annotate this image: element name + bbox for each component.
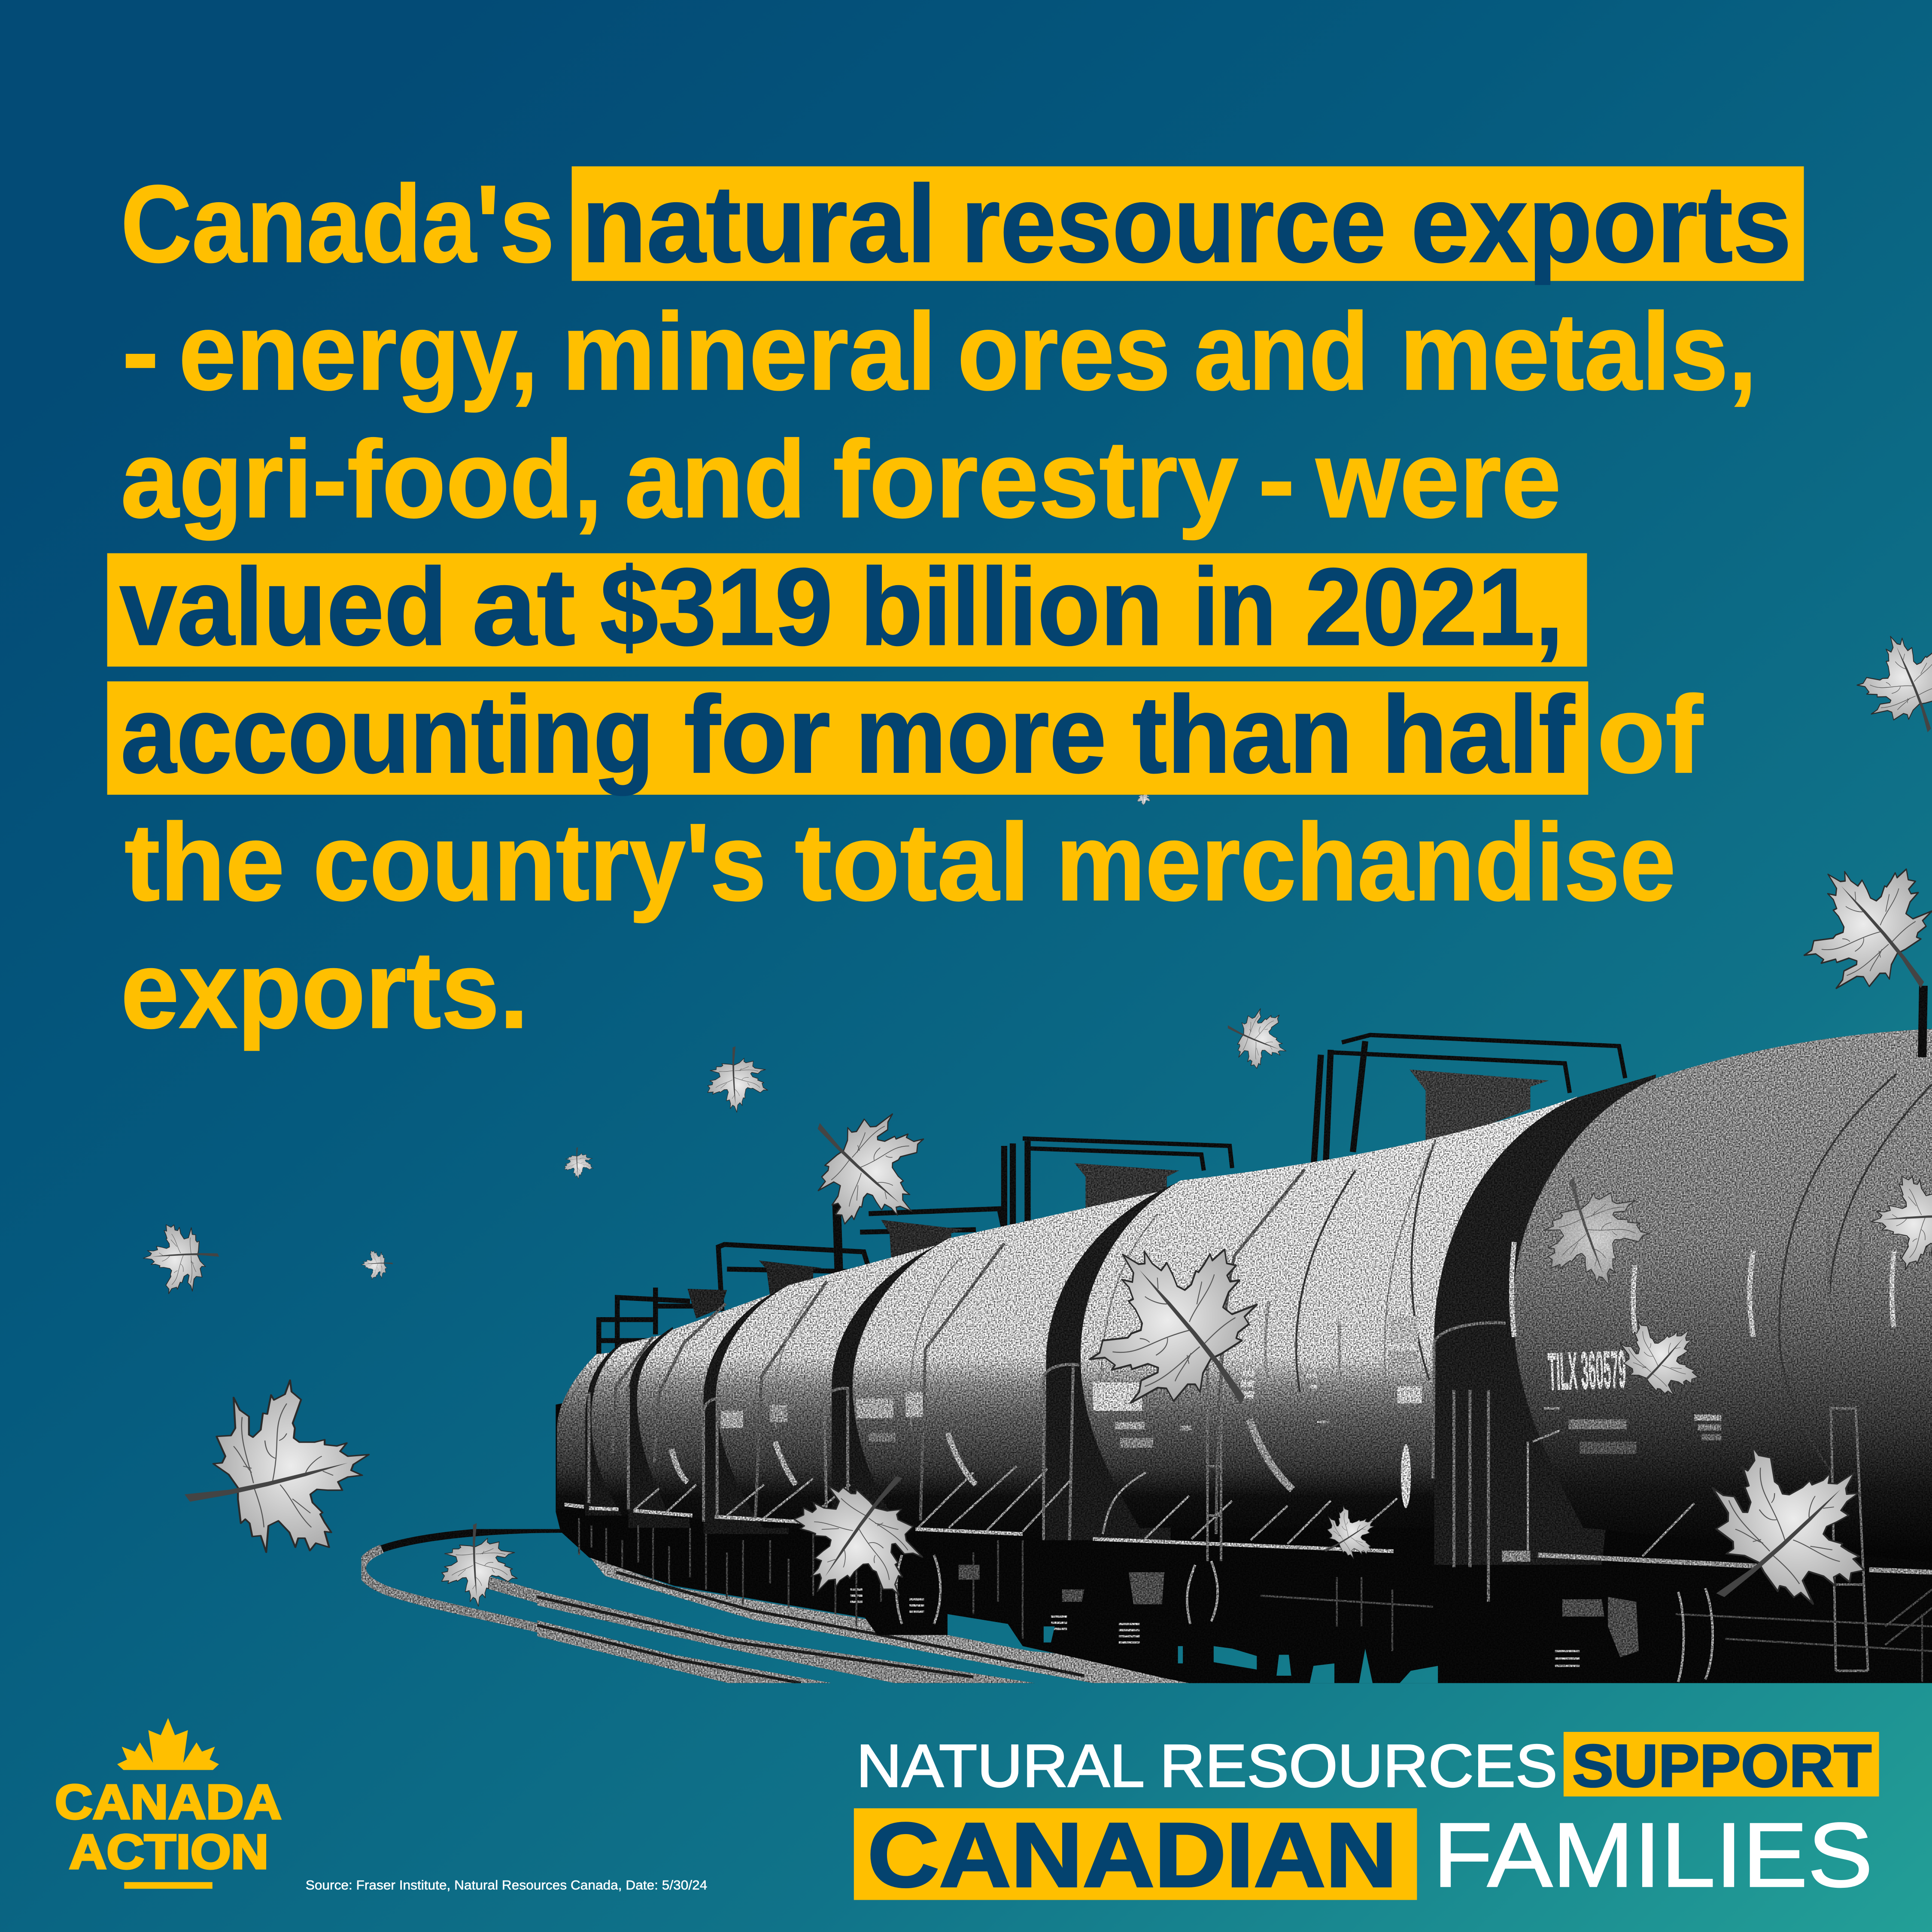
springs <box>850 1589 1580 1666</box>
logo underline <box>124 1882 213 1889</box>
logo word ACTION: ACTION <box>69 1825 269 1879</box>
headline line 6: the <box>125 801 285 923</box>
leaf 3 <box>1216 994 1301 1078</box>
headline line 4 highlighted: billion <box>860 546 1163 668</box>
leaf 14 <box>1863 1170 1932 1281</box>
headline line 2: metals, <box>1400 291 1757 413</box>
leaf 6 <box>562 1145 597 1182</box>
headline line 2: ores <box>957 291 1170 413</box>
dome: third car <box>881 1220 965 1274</box>
headline line 5: of <box>1597 674 1703 796</box>
tank 3 <box>832 1239 949 1534</box>
headline line 2: mineral <box>562 291 936 413</box>
leaf 2 <box>1776 840 1932 1029</box>
tank 1 <box>1513 1029 1932 1562</box>
headline line 5: half <box>1381 674 1575 796</box>
headline block <box>107 163 1804 1051</box>
dome: second car <box>1075 1163 1179 1216</box>
headline line 3 <box>121 418 1561 541</box>
leaf 5 <box>787 1080 953 1248</box>
headline line 2: - <box>122 291 159 413</box>
railing: second car <box>1004 1141 1027 1241</box>
railings and domes <box>599 1035 1625 1358</box>
headline line 5: accounting <box>121 674 654 796</box>
slogan: FAMILIES: FAMILIES <box>1433 1804 1873 1906</box>
headline line 5: for <box>684 674 830 796</box>
gaps between wheels <box>948 1614 1438 1683</box>
leaf 11 <box>1055 1211 1293 1455</box>
headline line 1: natural <box>582 163 936 286</box>
headline line 6: country's <box>313 801 766 923</box>
headline line 2: and <box>1194 291 1369 413</box>
highlight: SUPPORT <box>1564 1732 1879 1796</box>
highlight: accounting for more than half <box>107 681 1588 795</box>
rail B <box>537 1620 832 1683</box>
slogan: NATURAL RESOURCES: NATURAL RESOURCES <box>857 1732 1558 1799</box>
logo word CANADA: CANADA <box>55 1775 282 1829</box>
icon: maple crown <box>117 1718 219 1770</box>
headline line 4 highlighted <box>119 546 1564 668</box>
car number: TILX 360579 <box>1547 1340 1627 1401</box>
leaf 8 <box>359 1249 395 1283</box>
headline line 6 <box>125 801 1676 923</box>
decals <box>721 1316 1721 1454</box>
tank 7 <box>557 1349 641 1510</box>
headline line 5 <box>121 674 1703 796</box>
rail A <box>537 1591 1035 1683</box>
railing: far cars <box>599 1245 869 1358</box>
headline line 2 <box>122 291 1757 413</box>
tank 2 <box>1046 1183 1177 1540</box>
leaf 15 <box>1662 1409 1901 1643</box>
headline line 3: forestry <box>833 418 1238 541</box>
headline line 1: exports <box>1411 163 1792 286</box>
headline line 1 <box>121 163 1792 286</box>
leaf 7 <box>137 1220 224 1302</box>
block at beam end <box>1502 1554 1530 1558</box>
spindle highlight <box>1401 1444 1411 1508</box>
tiny leaf behind text <box>1136 790 1152 807</box>
railing: front car <box>1313 1041 1365 1170</box>
headline line 7: exports. <box>121 929 529 1051</box>
rail strip under the train <box>589 1556 1318 1683</box>
headline line 5: more <box>855 674 1106 796</box>
headline line 4 highlighted: 2021, <box>1305 546 1564 668</box>
slogan: CANADIAN: CANADIAN <box>867 1804 1397 1906</box>
white marks <box>671 1242 1894 1490</box>
slogan <box>854 1732 1879 1906</box>
bogies and wheels <box>579 1518 1922 1682</box>
tank 5 <box>629 1327 690 1528</box>
front top post <box>1922 986 1923 1057</box>
hand holds <box>589 1323 1506 1602</box>
logo: Canada Action <box>55 1718 282 1889</box>
tank 6 <box>585 1342 653 1516</box>
headline line 4 highlighted: valued <box>119 546 447 668</box>
tank seams and walkways <box>612 1075 1932 1534</box>
highlight: CANADIAN <box>854 1808 1417 1900</box>
tank 4 <box>704 1285 789 1534</box>
band and tank 1 <box>1434 1075 1656 1565</box>
far-car frame flecks <box>579 1518 1922 1682</box>
leaf 12 <box>1539 1170 1655 1293</box>
headline line 3: agri-food, <box>121 418 602 541</box>
headline line 5: than <box>1132 674 1353 796</box>
headline line 3: were <box>1315 418 1561 541</box>
leaf 13 <box>1596 1300 1715 1418</box>
headline line 6: merchandise <box>1056 801 1676 923</box>
undercarriage silhouette <box>556 1368 1932 1683</box>
dome: front car <box>1410 1069 1549 1148</box>
slogan: SUPPORT: SUPPORT <box>1572 1732 1871 1799</box>
leaf 10 <box>436 1518 526 1613</box>
maple leaves <box>137 628 1932 1643</box>
dome: far cars <box>687 1261 822 1318</box>
headline line 4 highlighted: $319 <box>600 546 833 668</box>
railing: third car <box>837 1204 839 1282</box>
leaf 16 <box>769 1445 959 1634</box>
headline line 6: total <box>795 801 1030 923</box>
headline line 1: resource <box>961 163 1386 286</box>
headline line 4 highlighted: in <box>1193 546 1276 668</box>
leaf 17 <box>1312 1498 1384 1567</box>
headline line 1: Canada's <box>121 163 554 286</box>
highlight: valued at $319 billion <box>107 553 1587 667</box>
leaf 1 <box>1850 628 1932 742</box>
leaf 4 <box>703 1042 775 1117</box>
highlight: natural resource exports <box>572 166 1804 281</box>
leaf 9 <box>185 1380 369 1552</box>
headline line 3: and <box>625 418 806 541</box>
headline line 4 highlighted: at <box>472 546 575 668</box>
ladders <box>1207 1227 1868 1671</box>
truck details <box>959 1565 1639 1657</box>
headline line 2: energy, <box>179 291 538 413</box>
headline line 3: - <box>1258 418 1295 541</box>
railway tracks <box>361 1529 1318 1683</box>
tank car train <box>556 986 1932 1683</box>
frame beams <box>564 1227 1932 1671</box>
track loop <box>382 1529 562 1549</box>
source note: Source: Fraser Institute, Natural Resources Canada, Date: 5/30/24 <box>306 1877 707 1893</box>
